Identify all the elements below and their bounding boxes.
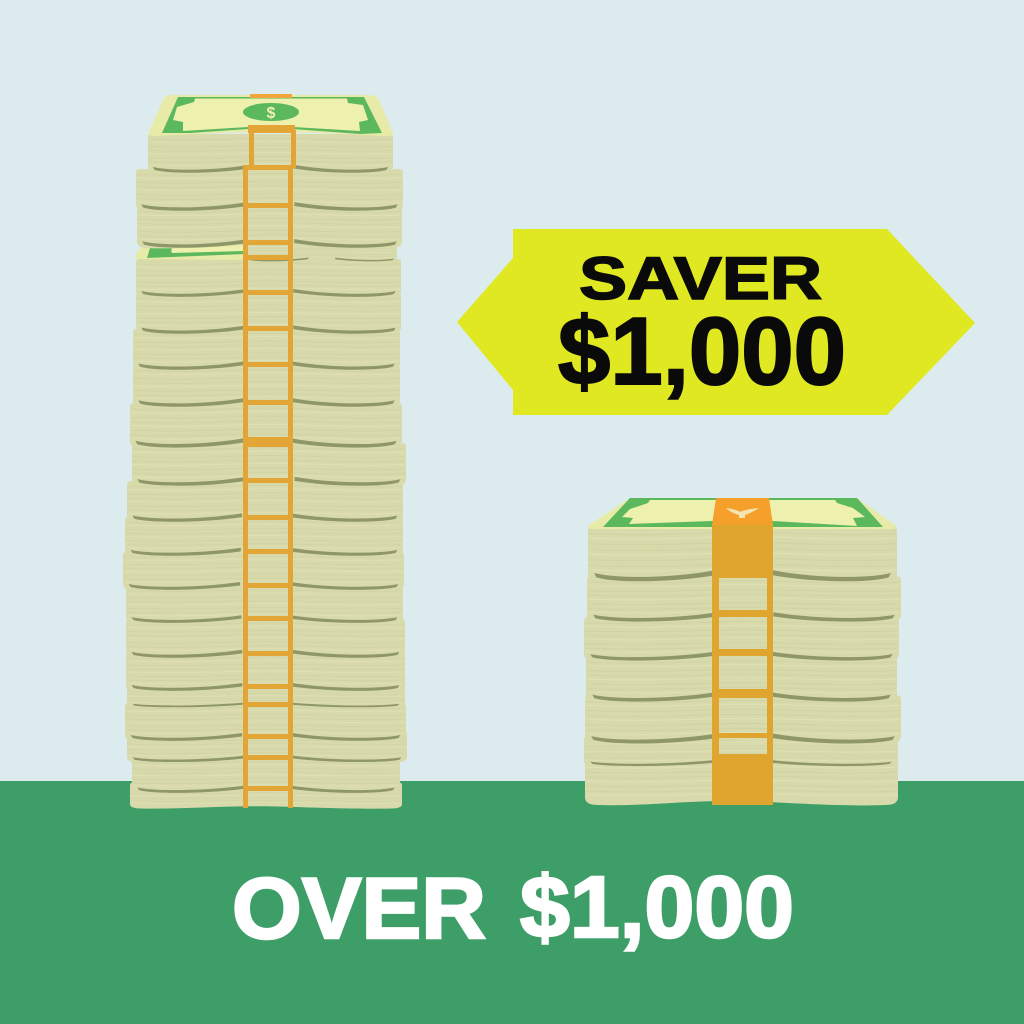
orange paper band on short stack	[712, 498, 773, 805]
partly hidden banknote on the middle bundle	[135, 245, 245, 260]
bottom heading: over $1,000	[232, 859, 794, 957]
dollar seal: $	[267, 105, 276, 122]
band top panel	[712, 498, 773, 525]
orange ladder band on tall stack	[243, 125, 296, 808]
tall stack bundles	[123, 259, 407, 809]
band stub behind banknote	[250, 94, 292, 98]
top banknote on tall stack	[149, 94, 393, 136]
band emblem	[726, 508, 759, 518]
label: $1,000: $1,000	[558, 298, 846, 405]
background sky	[0, 0, 1024, 782]
thin bundle under the upper stack	[245, 242, 397, 262]
tall stack of money	[123, 94, 407, 809]
callout banner: saver	[457, 229, 975, 415]
short stack bundles	[584, 526, 901, 805]
label: SAVER: SAVER	[579, 245, 822, 312]
short stack of money	[584, 498, 901, 805]
bottom heading: over $1,000: $1,000	[520, 859, 794, 956]
dollar seal	[243, 103, 299, 122]
bottom heading: over $1,000: OVER	[232, 861, 486, 957]
green ground	[0, 781, 1024, 1024]
top banknote on short stack	[588, 498, 896, 529]
upper bundles	[136, 134, 403, 249]
